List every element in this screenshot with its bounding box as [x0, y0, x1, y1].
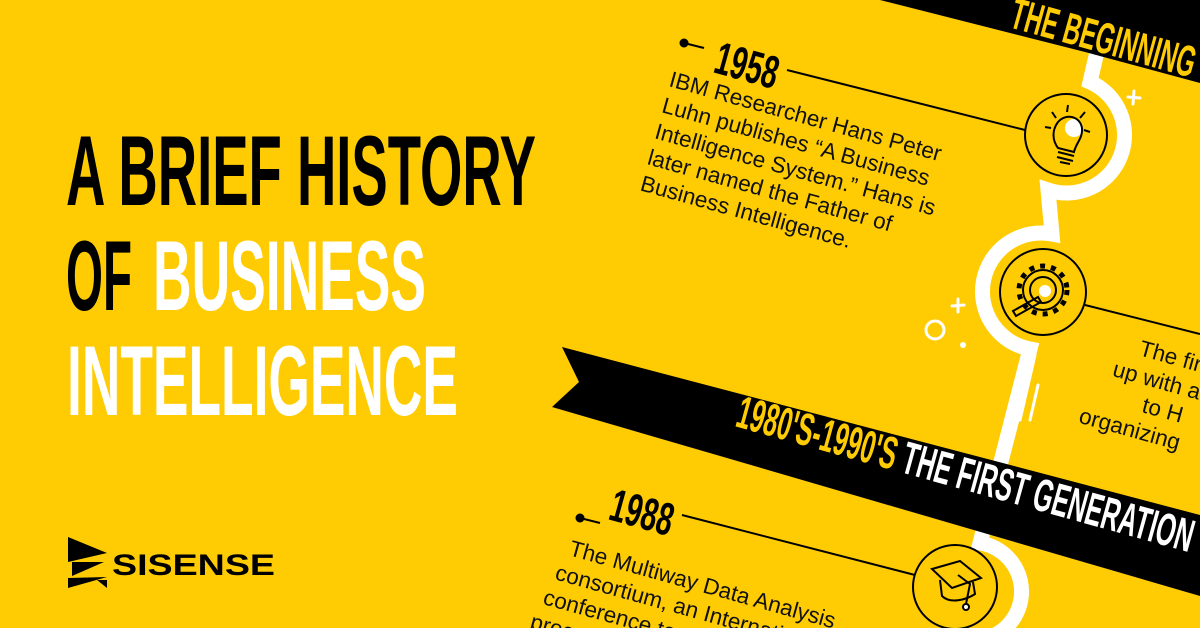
title [66, 115, 536, 436]
icon: graduation cap [913, 545, 997, 628]
event 1958: Business Intelligence. [638, 171, 854, 253]
event 1958: IBM Researcher Hans Peter [667, 67, 945, 166]
icon: gear wrench [1000, 249, 1086, 335]
event 1958: Luhn publishes “A Business [659, 93, 933, 191]
text: right event: organizing [1076, 403, 1183, 455]
timeline path [965, 30, 1125, 628]
title: OF [66, 220, 132, 331]
title: BUSINESS [153, 220, 426, 331]
title: A BRIEF HISTORY [66, 115, 536, 226]
banner: 1980s-1990s [552, 347, 1200, 596]
event 1958: 1958 [709, 32, 785, 99]
title: INTELLIGENCE [67, 325, 458, 436]
text: right event [1076, 325, 1200, 460]
logo: sisense [68, 537, 275, 588]
event 1958: later named the Father of [645, 145, 896, 237]
event 1958 [638, 32, 1025, 272]
decorations [926, 91, 1140, 420]
text: right event: to H [1140, 393, 1186, 428]
icon: light bulb [1025, 94, 1107, 176]
logo: sisense: SISENSE [112, 549, 275, 582]
banner: the beginning [880, 0, 1200, 87]
event 1958: Intelligence System.” Hans is [652, 119, 938, 220]
event 1988: 1988 [604, 479, 680, 546]
event 1988 [528, 479, 915, 628]
